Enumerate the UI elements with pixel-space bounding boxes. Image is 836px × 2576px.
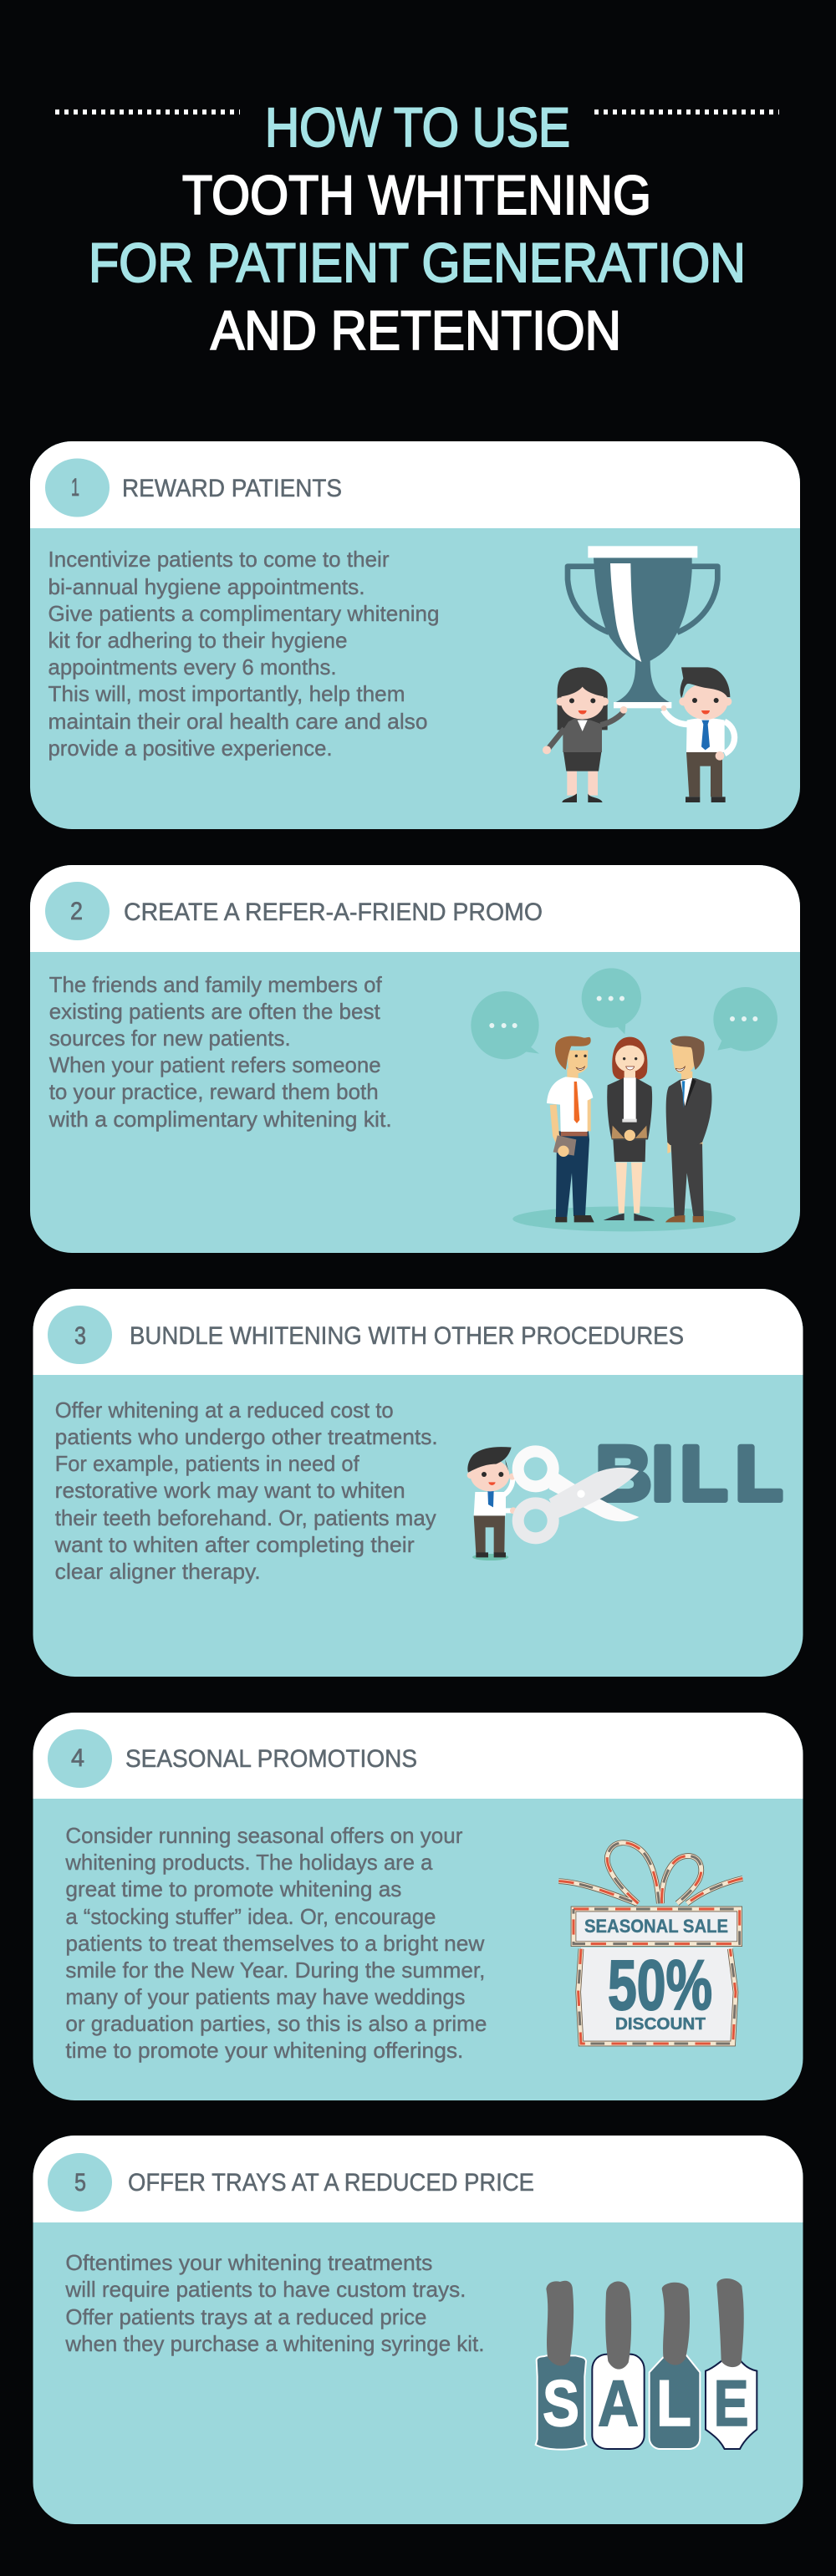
body text 4: great time to promote whitening as [65,1876,401,1901]
number badge 1: 1 [71,474,79,501]
illustration: SALE price tags: E [714,2366,749,2440]
illustration: BILL word cut by scissors [467,1431,782,1560]
body text 2: When your patient refers someone [49,1052,381,1077]
number badge 1 [45,458,110,517]
number badge 3: 3 [74,1322,86,1350]
body text 4: patients to treat themselves to a bright new [65,1931,485,1956]
body text 1: This will, most importantly, help them [48,681,405,706]
body text 4: Consider running seasonal offers on your [65,1823,463,1848]
illustration: seasonal sale gift box: 50% [608,1946,712,2024]
body text 4: many of your patients may have weddings [65,1984,465,2009]
illustration: three people talking with speech bubbles [471,968,777,1231]
body text 2: to your practice, reward them both [49,1079,379,1104]
body text 4: whitening products. The holidays are a [64,1850,433,1875]
body text 3: their teeth beforehand. Or, patients may [55,1505,436,1530]
body text 1: Incentivize patients to come to their [48,547,390,572]
body text 4: time to promote your whitening offerings. [65,2038,463,2063]
body text 3 [54,1397,438,1584]
illustration: SALE price tags: L [656,2366,691,2440]
title: AND RETENTION [211,299,621,361]
illustration: SALE price tags: S [543,2366,579,2440]
body text 1: provide a positive experience. [48,736,333,761]
body text 1: maintain their oral health care and also [48,709,428,734]
number badge 4 [48,1729,112,1788]
body text 1: kit for adhering to their hygiene [48,628,348,653]
panel: refer a friend [30,865,800,1253]
body text 2: sources for new patients. [49,1026,291,1051]
body text 3: restorative work may want to whiten [55,1478,405,1503]
body text 5: Oftentimes your whitening treatments [65,2250,432,2275]
title: TOOTH WHITENING [182,164,651,226]
number badge 2 [45,882,110,940]
heading 3: BUNDLE WHITENING WITH OTHER PROCEDURES [130,1322,684,1350]
number badge 4: 4 [71,1744,84,1772]
body text 5: Offer patients trays at a reduced price [65,2304,426,2329]
body text 3: clear aligner therapy. [55,1559,261,1584]
title: HOW TO USE [265,96,570,158]
illustration: trophy held by two people [543,546,735,802]
body text 3: patients who undergo other treatments. [55,1424,438,1449]
heading 5: OFFER TRAYS AT A REDUCED PRICE [128,2169,534,2197]
body text 4: or graduation parties, so this is also a prime [65,2011,487,2036]
body text 3: want to whiten after completing their [54,1532,415,1557]
heading 1: REWARD PATIENTS [122,475,342,502]
body text 4: a “stocking stuffer” idea. Or, encourage [65,1904,436,1929]
body text 2 [48,972,392,1132]
body text 1: appointments every 6 months. [48,654,336,680]
panel: seasonal promotions [33,1713,803,2100]
illustration: seasonal sale gift box [558,1843,742,2044]
body text 1 [48,547,440,761]
panel: bundle whitening [33,1289,803,1677]
heading 4: SEASONAL PROMOTIONS [125,1745,417,1773]
title [55,96,779,361]
illustration: SALE price tags: A [598,2366,639,2440]
panel: offer trays [33,2136,803,2524]
body text 5: will require patients to have custom trays. [64,2277,466,2302]
heading 2: CREATE A REFER-A-FRIEND PROMO [124,899,543,926]
body text 1: Give patients a complimentary whitening [48,601,440,626]
illustration: BILL word cut by scissors: BILL [596,1431,782,1516]
body text 2: The friends and family members of [49,972,382,997]
body text 2: existing patients are often the best [49,999,380,1024]
illustration: seasonal sale gift box: SEASONAL SALE [584,1916,728,1937]
number badge 3 [48,1306,112,1364]
body text 5 [64,2250,484,2356]
title: FOR PATIENT GENERATION [89,232,746,293]
body text 3: Offer whitening at a reduced cost to [55,1397,394,1423]
illustration: SALE price tags [536,2278,757,2450]
body text 4: smile for the New Year. During the summer, [65,1957,485,1983]
number badge 5: 5 [74,2169,86,2197]
body text 4 [64,1823,487,2063]
number badge 2: 2 [70,898,83,925]
panel: reward patients [30,441,800,829]
body text 1: bi-annual hygiene appointments. [48,574,364,599]
body text 5: when they purchase a whitening syringe kit. [64,2331,484,2356]
body text 3: For example, patients in need of [55,1451,359,1476]
body text 2: with a complimentary whitening kit. [48,1107,392,1132]
number badge 5 [48,2153,112,2212]
illustration: seasonal sale gift box: DISCOUNT [615,2015,706,2034]
